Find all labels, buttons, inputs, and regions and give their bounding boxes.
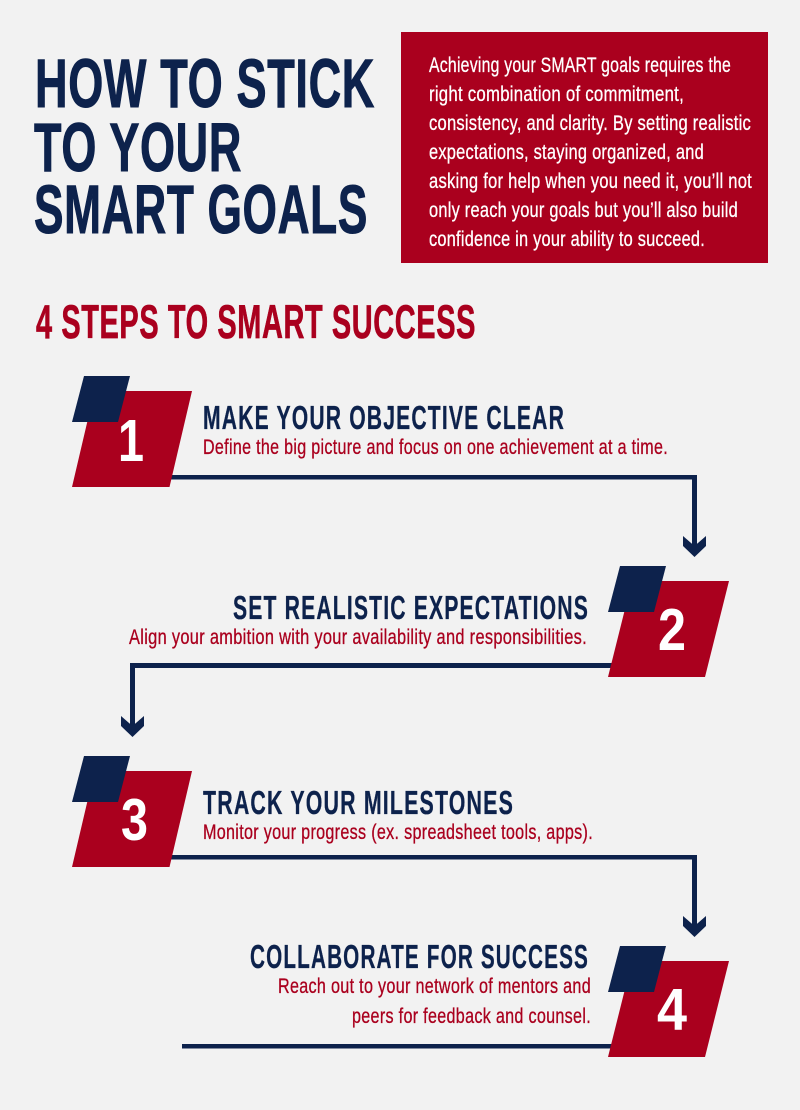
step 2	[129, 566, 729, 677]
step 3	[72, 756, 593, 867]
panel: introduction	[401, 32, 768, 263]
title: TO YOUR	[34, 109, 242, 186]
step 4 heading: COLLABORATE FOR SUCCESS	[250, 938, 589, 975]
icon: step 4 badge: 4	[657, 977, 687, 1043]
step 3 description: Monitor your progress (ex. spreadsheet tools, apps).	[203, 821, 593, 844]
step 4	[250, 938, 729, 1057]
icon: step 1 badge: 1	[118, 408, 144, 474]
icon: step 4 badge	[608, 946, 729, 1057]
panel: introduction: confidence in your ability to succeed.	[429, 228, 705, 251]
title	[34, 45, 375, 248]
icon: step 3 badge: 3	[121, 787, 148, 853]
step 1 heading: MAKE YOUR OBJECTIVE CLEAR	[203, 399, 565, 436]
panel: introduction: expectations, staying organized, and	[429, 141, 704, 164]
arrow: step 2 to step 3	[121, 663, 615, 737]
icon: step 2 badge: 2	[658, 597, 686, 663]
step 2 description: Align your ambition with your availability and responsibilities.	[129, 626, 587, 649]
heading: 4 steps: 4 STEPS TO SMART SUCCESS	[36, 295, 476, 348]
step 3 heading: TRACK YOUR MILESTONES	[203, 784, 514, 821]
step 4 description: peers for feedback and counsel.	[352, 1005, 591, 1028]
title: SMART GOALS	[34, 171, 368, 248]
step 1	[72, 376, 668, 487]
step 4 description	[278, 975, 591, 1028]
step 2 heading: SET REALISTIC EXPECTATIONS	[233, 589, 589, 626]
arrow: step 1 to step 2	[165, 475, 706, 557]
step 4 description: Reach out to your network of mentors and	[278, 975, 591, 998]
title: HOW TO STICK	[35, 45, 375, 122]
icon: step 1 badge	[72, 376, 192, 487]
icon: step 2 badge	[608, 566, 729, 677]
step 1 description: Define the big picture and focus on one achievement at a time.	[203, 436, 668, 459]
panel: introduction: right combination of commitment,	[429, 83, 684, 106]
icon: step 3 badge	[72, 756, 192, 867]
closing line	[182, 1044, 617, 1048]
arrow: step 3 to step 4	[165, 855, 706, 937]
